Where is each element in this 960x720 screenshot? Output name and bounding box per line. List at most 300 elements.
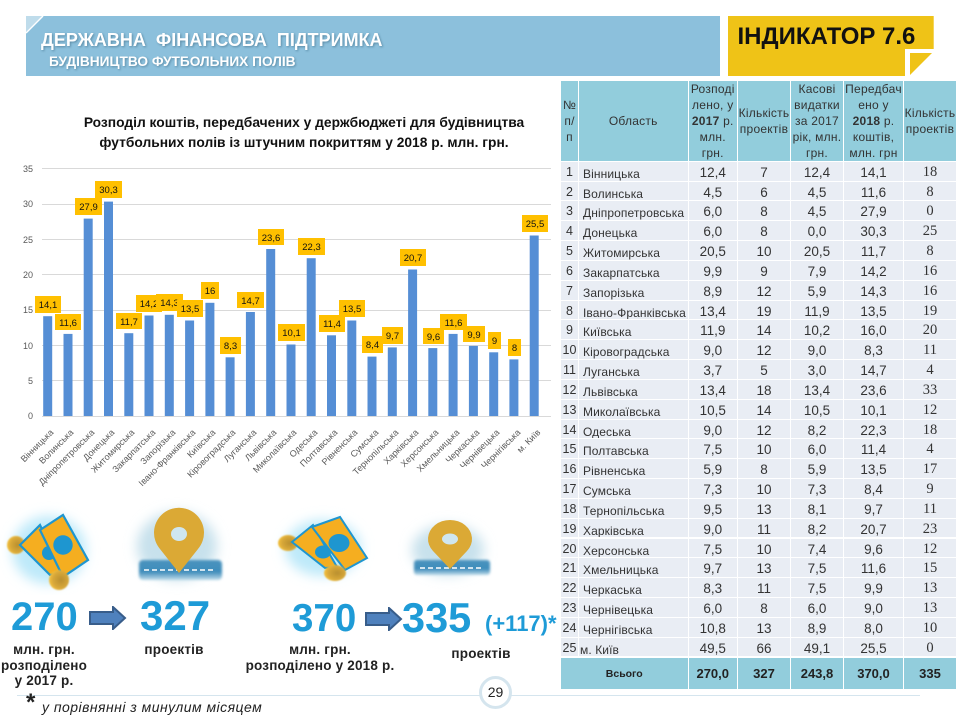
table header: Область (609, 114, 658, 128)
caption: 370: млн. грн. (289, 642, 351, 657)
table rows: 17 (563, 482, 576, 496)
table rows: Херсонська (583, 544, 649, 557)
caption: 270: млн. грн. (13, 642, 75, 657)
chart title: Розподіл коштів, передбачених у держбюджеті для будівництва (84, 115, 524, 130)
stat: change: (+117)* (485, 611, 557, 636)
table rows: 10,5 (700, 403, 726, 418)
y axis labels: 5 (28, 376, 33, 386)
category labels: Херсонська (399, 427, 440, 469)
table rows: 5 (760, 363, 768, 378)
table rows: 7,5 (703, 442, 722, 457)
icon: location pin 2017 (137, 508, 222, 580)
table header: млн. грн (849, 146, 898, 160)
table rows: 7 (760, 165, 768, 180)
value labels: 14,2 (140, 299, 158, 310)
table rows: 9,7 (703, 561, 722, 576)
table rows: 25 (923, 223, 937, 239)
caption: 370 (246, 642, 394, 673)
table rows: 7,3 (808, 482, 826, 497)
category labels: Львівська (243, 427, 278, 463)
table rows: м. Київ (580, 643, 619, 656)
table rows: Чернівецька (583, 603, 653, 617)
icon: location pin 2018 (412, 520, 490, 575)
category labels: Миколаївська (251, 427, 298, 475)
table rows: Рівненська (583, 464, 645, 478)
y axis labels: 0 (28, 411, 33, 421)
table rows: 23 (563, 601, 576, 615)
category labels: Вінницька (19, 427, 55, 464)
value labels: 14,7 (241, 296, 260, 307)
table rows: 11,6 (861, 561, 886, 576)
category labels: Запорізька (138, 427, 177, 466)
table rows: 5,9 (808, 284, 826, 299)
table header: 2017 р. (692, 114, 734, 128)
table rows: 8 (760, 204, 768, 219)
table rows: 11,9 (700, 323, 725, 338)
table rows: 19 (756, 304, 772, 318)
table rows: 13 (756, 621, 772, 636)
table rows: 6,0 (808, 442, 826, 457)
table rows: 6 (760, 184, 768, 200)
page number: 29 (488, 684, 503, 700)
table rows: 12 (923, 540, 937, 556)
footnote asterisk: * (26, 689, 35, 716)
table rows: 8 (760, 601, 768, 616)
table rows: Івано-Франківська (583, 306, 686, 319)
table rows: 19 (563, 522, 576, 536)
category labels: Кіровоградська (185, 427, 237, 480)
table rows: Київська (583, 325, 632, 339)
banner title: ДЕРЖАВНА ФІНАНСОВА ПІДТРИМКА (41, 30, 383, 50)
table rows: 8,4 (864, 482, 883, 497)
table rows: 33 (923, 382, 937, 398)
icons layer (6, 506, 492, 592)
value labels: 20,7 (404, 253, 422, 264)
table header: за 2017 (795, 114, 839, 128)
value labels: 13,5 (181, 304, 199, 315)
table rows: 6,0 (703, 601, 722, 616)
table rows: 2 (566, 184, 573, 198)
table header: 2018 р. (853, 114, 894, 128)
table header (561, 81, 956, 161)
table rows: 5,9 (703, 462, 722, 477)
value labels: 8 (512, 343, 517, 354)
table rows: 10,5 (804, 403, 830, 418)
table header: проектів (906, 122, 954, 136)
table rows: 10 (756, 542, 772, 556)
value labels: 8,4 (366, 340, 379, 351)
table rows: 20,5 (804, 244, 830, 259)
table total row: 270,0 (696, 666, 729, 681)
category labels: Полтавська (298, 427, 339, 469)
table rows: 30,3 (860, 224, 887, 239)
table rows: 10,2 (804, 323, 830, 338)
table rows: 11 (757, 581, 771, 596)
table rows: 8,2 (808, 422, 826, 438)
table rows: 15 (923, 560, 937, 576)
icon: money 2018 (278, 517, 367, 581)
caption: 335: проектів (451, 646, 511, 661)
table rows: 8 (566, 304, 573, 318)
stat: 370: 370 (292, 597, 356, 640)
table rows: 6,0 (703, 224, 722, 239)
y axis labels: 20 (23, 270, 33, 280)
category labels: Донецька (81, 427, 116, 463)
y axis labels: 15 (23, 305, 33, 315)
y axis labels: 30 (23, 199, 33, 209)
category labels: Житомирська (89, 427, 136, 475)
table rows: 9,5 (703, 502, 722, 517)
table rows: 6,0 (703, 204, 722, 219)
table rows: 9,0 (703, 422, 722, 438)
table rows: 8 (760, 224, 768, 239)
table header: рік, млн. (793, 130, 841, 144)
table rows: 14 (563, 422, 576, 436)
table rows: Львівська (583, 385, 638, 399)
caption: 270: розподілено (1, 658, 87, 672)
value labels: 11,4 (323, 319, 341, 330)
stat: 327: 327 (140, 592, 210, 639)
table rows: 9,0 (703, 343, 722, 358)
table rows: 13,5 (860, 304, 887, 318)
table header: Передбач (845, 82, 902, 96)
table rows: 11 (757, 522, 771, 537)
caption: 270 (1, 642, 87, 688)
table rows: 16,0 (860, 323, 887, 338)
value labels: 10,1 (282, 328, 301, 339)
table rows: 13,5 (860, 462, 887, 477)
category labels: Київська (185, 427, 217, 460)
y axis labels (23, 164, 33, 421)
value labels: 13,5 (343, 304, 361, 315)
category labels: Дніпропетровська (37, 427, 96, 487)
table rows: Кіровоградська (583, 345, 669, 359)
table rows: 4,5 (703, 184, 722, 200)
arrow 1 (89, 606, 126, 630)
table rows: 23,6 (860, 383, 887, 398)
table rows: 8,0 (864, 621, 883, 636)
table rows: 10 (756, 482, 772, 497)
table rows: 18 (923, 422, 937, 438)
table rows: 13,4 (700, 383, 726, 398)
y axis labels: 10 (23, 341, 33, 351)
table rows: 15 (563, 442, 576, 456)
table total row: 243,8 (801, 666, 833, 681)
table total row: Всього (606, 668, 643, 680)
value labels: 27,9 (79, 202, 98, 213)
value labels: 30,3 (99, 185, 118, 196)
table rows: 6 (566, 264, 573, 278)
category labels (19, 427, 543, 488)
table rows: 6,0 (808, 601, 826, 616)
category labels: Хмельницька (415, 427, 461, 474)
table rows: Житомирська (583, 246, 660, 260)
table rows: 7,4 (808, 542, 826, 556)
table rows: 11 (563, 363, 576, 377)
table rows: 10 (756, 244, 772, 259)
value labels: 22,3 (302, 242, 321, 253)
arrow 2 (365, 607, 402, 631)
category labels: Рівненська (320, 427, 359, 467)
table rows: 8,9 (808, 621, 826, 636)
value labels: 11,6 (59, 318, 77, 329)
table rows: 12 (756, 343, 772, 358)
banner subtitle: БУДІВНИЦТВО ФУТБОЛЬНИХ ПОЛІВ (49, 54, 296, 69)
table rows: 0 (926, 203, 934, 219)
table rows: 19 (923, 302, 937, 318)
table rows: 0,0 (808, 224, 826, 239)
table rows: 24 (563, 621, 576, 635)
table rows: 10 (756, 442, 772, 457)
table rows: Хмельницька (583, 563, 659, 577)
table total row: 370,0 (857, 666, 890, 681)
table header: Кількість (905, 106, 955, 120)
table rows: 12 (563, 383, 576, 397)
data table (561, 81, 956, 689)
table rows: 18 (923, 164, 937, 180)
table rows: Миколаївська (583, 405, 660, 419)
table rows: 7 (566, 284, 573, 298)
category labels: Харківська (382, 427, 420, 466)
category labels: Сумська (348, 427, 380, 459)
table rows: Закарпатська (583, 266, 660, 280)
table rows: 22,3 (860, 422, 887, 438)
table rows: 7,5 (808, 581, 826, 596)
table rows: 22 (563, 581, 576, 595)
table rows: Сумська (583, 484, 631, 498)
table header: Касові (798, 82, 836, 96)
value labels: 25,5 (526, 219, 544, 230)
table rows: Полтавська (583, 444, 649, 458)
table rows: 13 (923, 580, 937, 596)
value labels: 9,6 (427, 332, 440, 343)
table header: Кількість (739, 106, 789, 120)
table header: Розподі (691, 82, 735, 96)
chart title (84, 115, 524, 150)
category labels: Закарпатська (110, 427, 157, 474)
table rows: Одеська (583, 424, 631, 438)
table total row: 327 (753, 666, 775, 681)
table rows: 13,4 (804, 383, 830, 398)
table rows: 10 (563, 343, 576, 357)
category labels: Волинська (37, 427, 75, 466)
table header: видатки (794, 98, 840, 112)
table rows: 8,1 (808, 502, 826, 517)
table rows: 11,4 (861, 442, 886, 457)
table header: № (563, 98, 576, 112)
footnote: у порівнянні з минулим місяцем (42, 699, 262, 715)
table rows: 4,5 (808, 184, 826, 200)
table rows: 3 (566, 204, 573, 218)
table rows: 25 (563, 641, 576, 655)
table rows: Волинська (583, 186, 643, 200)
y axis labels: 35 (23, 164, 33, 174)
table rows: 7,9 (808, 264, 826, 279)
caption: 270: у 2017 р. (15, 673, 73, 688)
table rows: 13 (756, 502, 772, 517)
table header: проектів (740, 122, 788, 136)
table rows: 25,5 (860, 641, 887, 656)
table rows: 8 (760, 462, 768, 477)
bars (43, 202, 539, 416)
table rows: 5,9 (808, 462, 826, 477)
category labels: Чернівецька (458, 427, 501, 471)
table rows: 14 (756, 403, 772, 418)
table header: ено у (858, 98, 889, 112)
table rows: 7,3 (703, 482, 722, 497)
table rows: 9,9 (703, 264, 722, 279)
table rows: 20,7 (860, 522, 887, 537)
table rows: 5 (566, 244, 573, 258)
table rows: 12 (756, 422, 772, 438)
table rows: 20,5 (700, 244, 726, 259)
value labels: 14,3 (160, 298, 179, 309)
table rows: 4,5 (808, 204, 826, 219)
table rows: 9,0 (703, 522, 722, 537)
table rows: 12 (923, 402, 937, 418)
table rows: 8,9 (703, 284, 722, 299)
table header: лено, у (692, 98, 733, 112)
table rows: 14,2 (860, 264, 887, 279)
table rows: 16 (923, 263, 937, 279)
table header: грн. (806, 146, 828, 160)
value labels: 23,6 (262, 233, 280, 244)
table rows: Черкаська (583, 583, 642, 597)
stat: 270: 270 (11, 595, 78, 639)
table rows: 9 (566, 323, 573, 337)
category labels: Чернігівська (479, 427, 522, 471)
table rows: 4 (926, 441, 934, 457)
table rows: 13 (756, 561, 772, 576)
table rows: 16 (923, 283, 937, 299)
table total row: 335 (919, 666, 941, 681)
value labels: 11,7 (120, 317, 138, 328)
table rows: 10,8 (700, 621, 726, 636)
indicator badge (728, 16, 934, 76)
value labels: 16 (205, 286, 215, 297)
table rows: 11,6 (861, 184, 886, 200)
table rows: 20 (923, 322, 937, 338)
table rows: 4 (566, 224, 573, 238)
table rows: Донецька (583, 226, 637, 240)
table rows: 9,7 (864, 502, 883, 517)
banner corner fold (26, 16, 44, 34)
value labels: 9 (492, 336, 497, 347)
table header: грн. (702, 146, 724, 160)
header banner (26, 16, 720, 76)
value labels: 8,3 (224, 341, 237, 352)
table rows: 14,3 (860, 284, 887, 299)
table rows: 9 (760, 264, 768, 279)
table rows: 9,9 (864, 581, 883, 596)
value labels: 9,7 (386, 331, 399, 342)
table rows: 20 (563, 542, 576, 556)
table rows: Запорізька (583, 286, 644, 300)
table rows: 23 (923, 521, 937, 537)
footer line (17, 695, 920, 696)
table rows: 21 (563, 561, 576, 575)
table rows: 4 (926, 362, 934, 378)
table rows: 9 (926, 481, 934, 497)
table rows: Харківська (583, 524, 644, 537)
table rows: 9,0 (808, 343, 826, 358)
value labels (35, 181, 548, 356)
table rows: 11 (923, 342, 937, 358)
table rows: 49,1 (804, 641, 830, 656)
table rows: 8 (926, 243, 934, 259)
table rows: Дніпропетровська (583, 206, 684, 220)
table header: п (566, 130, 573, 144)
table rows: 66 (756, 641, 772, 656)
table rows: Чернігівська (583, 623, 653, 637)
table rows: Луганська (583, 365, 640, 379)
table rows: 12,4 (700, 165, 726, 180)
table rows: 18 (756, 383, 772, 398)
table rows: 9,0 (864, 601, 883, 616)
table header: млн. (700, 130, 726, 144)
table rows: 17 (923, 461, 937, 477)
table header: коштів, (853, 130, 894, 144)
table rows: 8,3 (703, 581, 722, 596)
y axis labels: 25 (23, 235, 33, 245)
table rows: 10,1 (860, 403, 887, 418)
table rows: 14,1 (860, 165, 887, 180)
table rows: 13 (563, 403, 576, 417)
table header: п/ (564, 114, 575, 128)
bar chart (19, 164, 551, 488)
indicator badge: ІНДИКАТОР 7.6 (738, 23, 915, 50)
caption: 327: проектів (144, 642, 204, 657)
category labels: Одеська (287, 427, 319, 459)
table rows: 8 (926, 184, 934, 200)
table rows: 10 (923, 620, 937, 636)
table rows: 14 (756, 323, 772, 338)
value labels: 14,1 (39, 300, 57, 311)
value labels: 11,6 (445, 318, 462, 329)
category labels: Черкаська (444, 427, 481, 465)
table rows: 14,7 (860, 363, 887, 378)
table rows: 7,5 (808, 561, 826, 576)
table rows: 49,5 (700, 641, 726, 656)
category labels: м. Київ (515, 427, 543, 455)
caption: 370: розподілено у 2018 р. (246, 658, 394, 672)
table rows: 27,9 (860, 204, 887, 219)
table rows: 11 (923, 501, 937, 517)
table rows: 13,4 (700, 304, 726, 318)
chart title: футбольних полів із штучним покриттям у 2018 р. млн. грн. (99, 135, 509, 150)
table rows: 0 (926, 640, 934, 656)
table rows: Тернопільська (583, 504, 664, 518)
page number (479, 676, 512, 709)
table rows: 18 (563, 502, 576, 516)
table rows: 3,0 (808, 363, 826, 378)
table rows: 12 (756, 284, 772, 299)
category labels: Тернопільська (351, 427, 400, 477)
table rows: 13 (923, 600, 937, 616)
stat: 335: 335 (402, 594, 471, 641)
table rows: Вінницька (583, 167, 640, 181)
table rows: 8,2 (808, 522, 826, 537)
table rows: 11,7 (861, 244, 886, 259)
value labels: 9,9 (467, 330, 481, 341)
icon: money 2017 (7, 515, 88, 590)
table rows: 8,3 (864, 343, 883, 358)
table rows: 9,6 (864, 542, 883, 556)
category labels: Луганська (222, 427, 258, 464)
table rows: 16 (563, 462, 576, 476)
table rows: 12,4 (804, 165, 830, 180)
table rows: 1 (566, 165, 573, 179)
